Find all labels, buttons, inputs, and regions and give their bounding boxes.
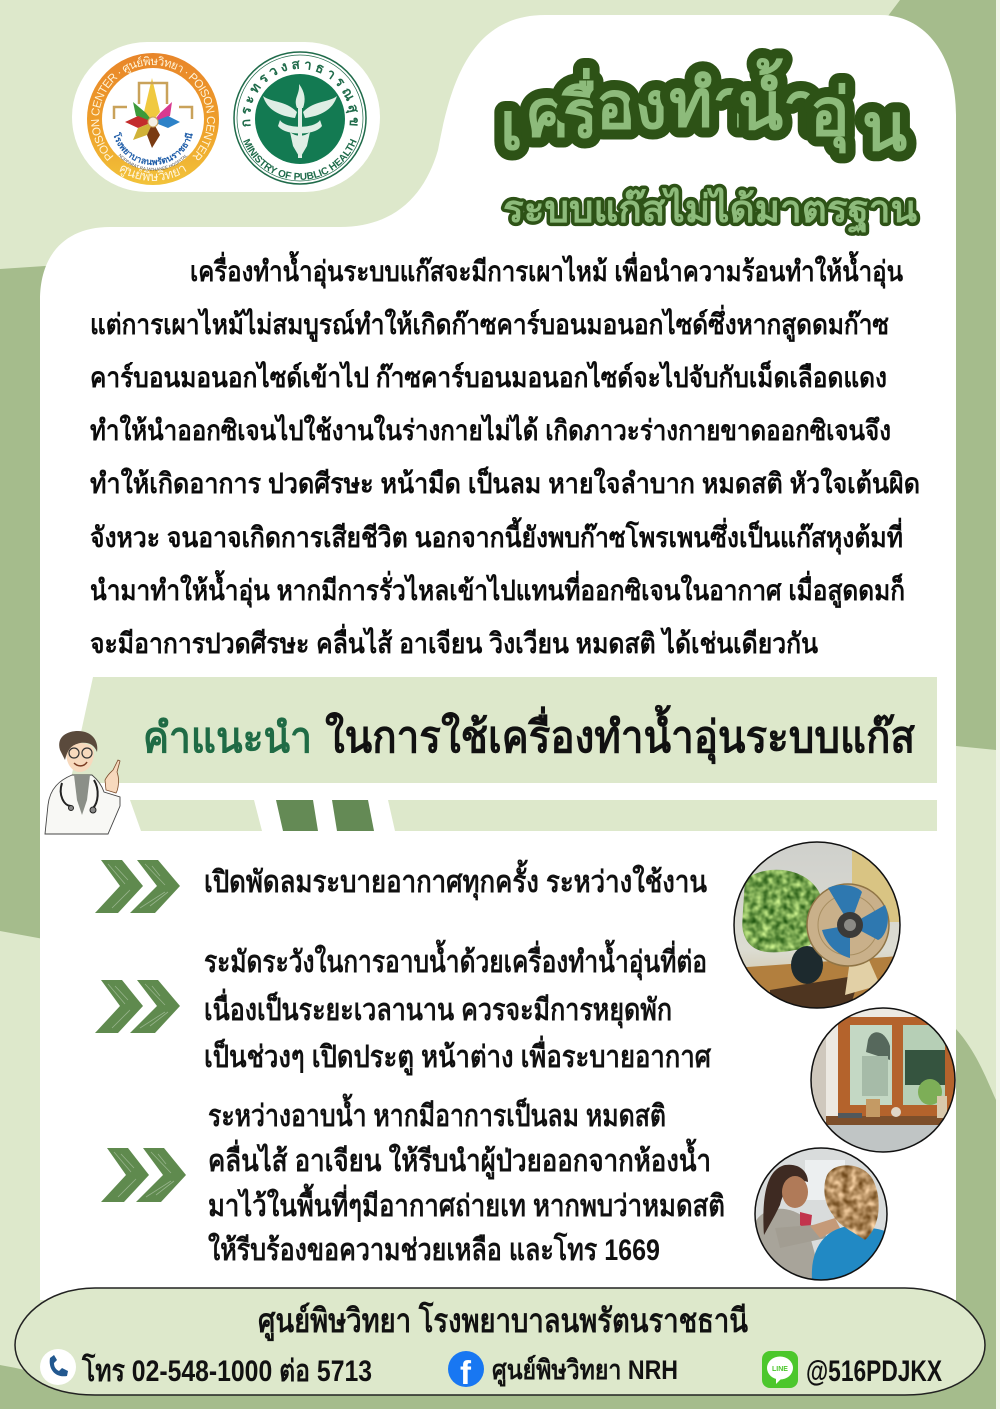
body paragraph	[90, 250, 920, 659]
edge strip	[996, 0, 1000, 1409]
photo: two women	[755, 1148, 890, 1280]
footer panel	[15, 1288, 985, 1395]
doctor illustration	[45, 731, 120, 834]
background shape: lower right	[900, 1029, 996, 1409]
body paragraph: เครื่องทำน้ำอุ่นระบบแก๊สจะมีการเผาไหม้ เพื่อนำความร้อนทำให้น้ำอุ่น	[190, 250, 903, 289]
item text: เป็นช่วงๆ เปิดประตู หน้าต่าง เพื่อระบายอากาศ	[204, 1035, 712, 1076]
title: น้ำ	[738, 57, 820, 143]
background shape: top right	[870, 0, 996, 750]
banner heading: usage: ในการใช้เครื่องทำน้ำอุ่นระบบแก๊ส	[325, 704, 915, 765]
background shape: left band	[0, 265, 60, 942]
emblem flower	[114, 78, 192, 148]
item text: ระหว่างอาบน้ำ หากมีอาการเป็นลม หมดสติ	[208, 1093, 666, 1133]
contact: phone	[40, 1349, 372, 1388]
body paragraph: ทำให้เกิดอาการ ปวดศีรษะ หน้ามืด เป็นลม หายใจลำบาก หมดสติ หัวใจเต้นผิด	[90, 466, 920, 499]
title: ทำ	[669, 66, 750, 140]
item text: เนื่องเป็นระยะเวลานาน ควรจะมีการหยุดพัก	[204, 988, 672, 1029]
list item 1	[95, 859, 707, 913]
title: ค	[525, 76, 569, 150]
title: รื่	[560, 67, 598, 151]
item text	[204, 939, 712, 1076]
list item 2	[95, 939, 712, 1076]
photo: window	[811, 1008, 956, 1155]
subtitle: ระบบแก๊สไม่ได้มาตรฐาน	[503, 187, 917, 234]
body paragraph: นำมาทำให้น้ำอุ่น หากมีการรั่วไหลเข้าไปแทนที่ออกซิเจนในอากาศ เมื่อสูดดมก็	[90, 569, 905, 608]
item text	[208, 1093, 725, 1267]
logo: ministry of public health: กระทรวงสาธารณสุข	[242, 60, 358, 127]
contact: facebook: ศูนย์พิษวิทยา NRH	[492, 1354, 678, 1387]
footer title: ศูนย์พิษวิทยา โรงพยาบาลนพรัตนราชธานี	[258, 1301, 748, 1342]
body paragraph: ทำให้นำออกซิเจนไปใช้งานในร่างกายไม่ได้ เกิดภาวะร่างกายขาดออกซิเจนจึง	[90, 414, 891, 446]
background shape: bottom	[0, 1365, 996, 1409]
logo: poison center: โรงพยาบาลนพรัตนราชธานี	[114, 132, 193, 166]
advice banner	[70, 677, 937, 783]
logo: poison center: POISON CENTER · ศูนย์พิษวิทยา · POISON CENTER	[91, 56, 216, 161]
title: ง	[635, 68, 667, 142]
contact: phone: โทร 02-548-1000 ต่อ 5713	[81, 1352, 372, 1388]
chevron icon	[95, 980, 180, 1033]
contact: facebook	[448, 1351, 678, 1391]
chevron icon	[95, 860, 180, 913]
contact: facebook: f	[460, 1354, 472, 1391]
item text: มาไว้ในพื้นที่ๆมีอากาศถ่ายเท หากพบว่าหมดสติ	[208, 1183, 725, 1223]
title: น	[862, 90, 907, 164]
item text: คลื่นไส้ อาเจียน ให้รีบนำผู้ป่วยออกจากห้องน้ำ	[208, 1138, 711, 1180]
logo: poison center: NOPPARAT RAJATHANEE HOSPITAL	[118, 154, 188, 171]
item text: ระมัดระวังในการอาบน้ำด้วยเครื่องทำน้ำอุ่นที่ต่อ	[204, 939, 707, 981]
logo pill	[72, 42, 380, 192]
contact: line	[762, 1351, 942, 1388]
decorative stripe	[130, 800, 937, 831]
body paragraph: คาร์บอนมอนอกไซด์เข้าไป ก๊าซคาร์บอนมอนอกไซด์จะไปจับกับเม็ดเลือดแดง	[90, 360, 887, 393]
body paragraph: จังหวะ จนอาจเกิดการเสียชีวิต นอกจากนี้ยังพบก๊าซโพรเพนซึ่งเป็นแก๊สหุงต้มที่	[90, 516, 903, 555]
contact: line: @516PDJKX	[806, 1355, 942, 1388]
item text: เปิดพัดลมระบายอากาศทุกครั้ง ระหว่างใช้งาน	[204, 859, 707, 901]
chevron icon	[101, 1148, 186, 1202]
title: อ	[596, 68, 636, 142]
body paragraph: จะมีอาการปวดศีรษะ คลื่นไส้ อาเจียน วิงเวียน หมดสติ ได้เช่นเดียวกัน	[90, 623, 818, 659]
logo: poison center: ศูนย์พิษวิทยา	[120, 166, 186, 181]
banner heading: advice: คำแนะนำ	[143, 714, 312, 761]
caduceus	[263, 84, 337, 158]
body paragraph: แต่การเผาไหม้ไม่สมบูรณ์ทำให้เกิดก๊าซคาร์บอนมอนอกไซด์ซึ่งหากสูดดมก๊าซ	[90, 304, 889, 342]
title: อุ่	[810, 75, 850, 154]
contact: line: LINE	[772, 1366, 788, 1373]
title: เ	[500, 89, 523, 163]
photo: plant and fan	[734, 842, 900, 1008]
list item 3	[101, 1093, 725, 1267]
logo: ministry of public health	[233, 51, 367, 185]
logo: ministry of public health: MINISTRY OF PUBLIC HEALTH	[243, 138, 357, 180]
item text: ให้รีบร้องขอความช่วยเหลือ และโทร 1669	[208, 1231, 660, 1267]
